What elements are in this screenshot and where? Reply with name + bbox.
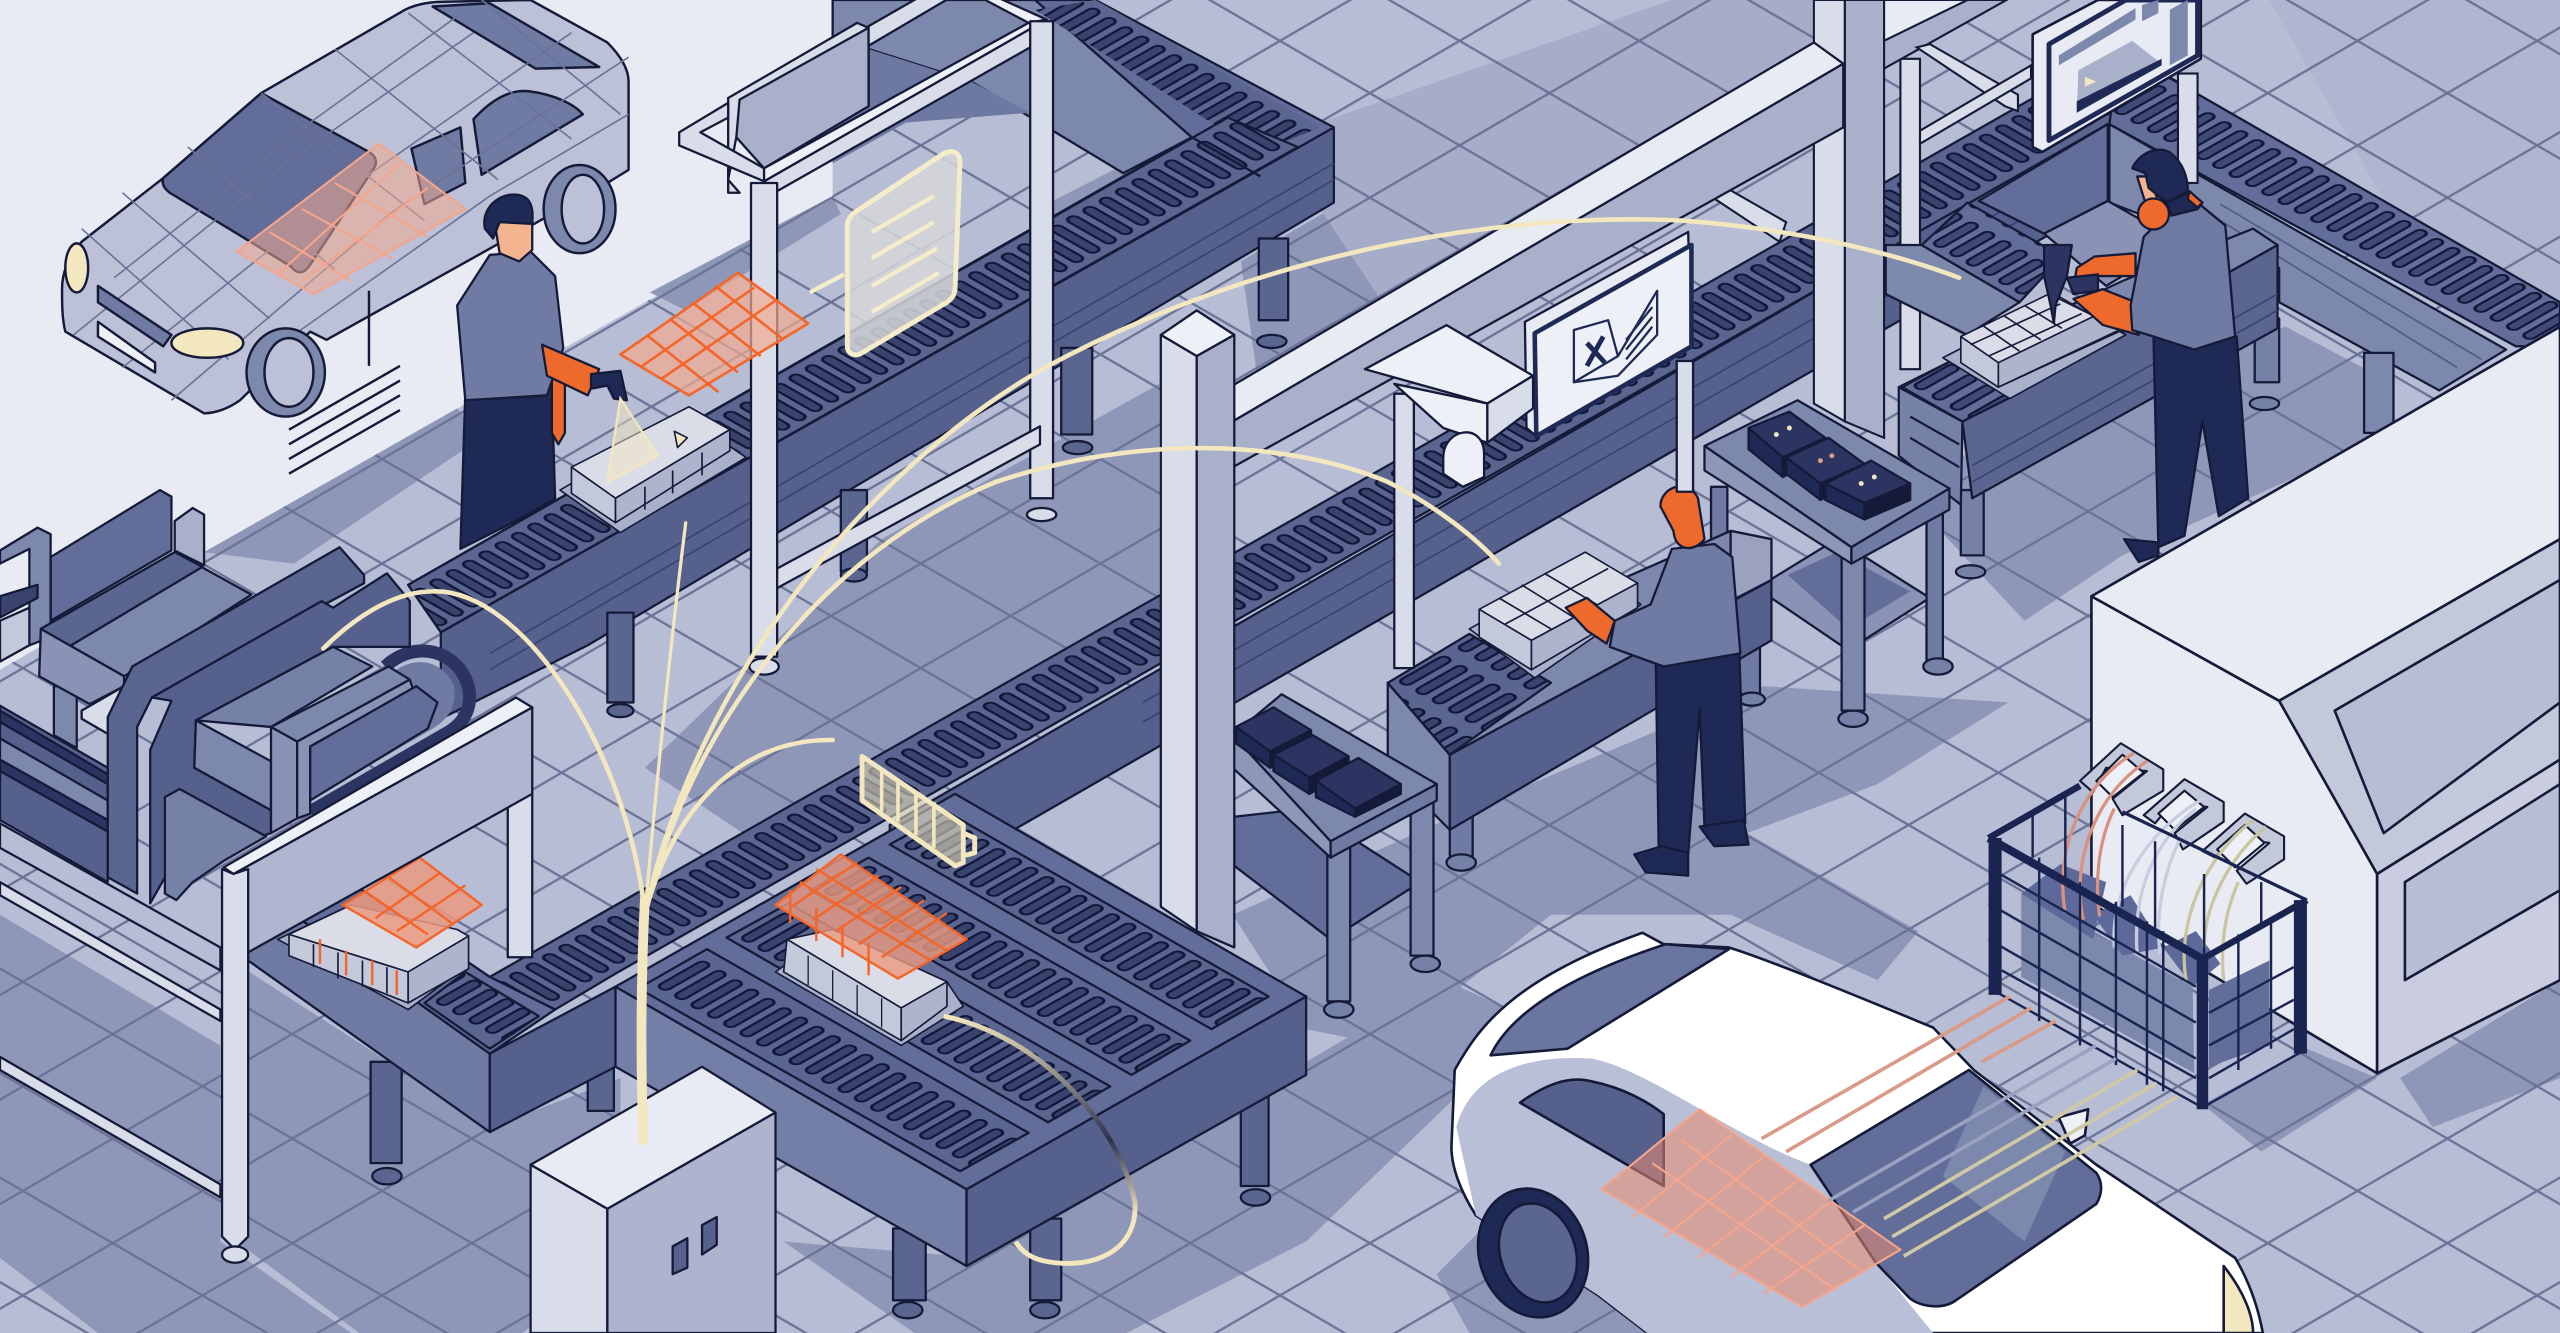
tray <box>1786 438 1864 500</box>
contents <box>2021 894 2194 1073</box>
dispenser <box>1443 432 1484 487</box>
strap <box>2167 193 2202 216</box>
strip <box>890 812 1269 1029</box>
headlight <box>2224 1266 2253 1333</box>
scanner <box>591 371 627 400</box>
icon: battery hologram <box>862 756 975 866</box>
window <box>2335 580 2560 833</box>
legs <box>460 389 555 549</box>
chain <box>310 651 470 812</box>
boot <box>2124 539 2158 562</box>
battery ghost <box>1602 1109 1900 1307</box>
hair <box>1660 486 1704 548</box>
lip and pane <box>728 23 869 193</box>
hair <box>484 194 533 239</box>
end slats <box>1902 361 2011 421</box>
torso <box>2131 203 2235 350</box>
corner slats <box>424 972 539 1049</box>
inner panel <box>1979 124 2108 234</box>
wheel <box>1462 1174 1604 1332</box>
rays into car <box>1762 996 2178 1256</box>
falling strands <box>2063 753 2266 980</box>
basket with hoppers <box>1989 743 2307 1109</box>
tall plate <box>51 490 171 621</box>
strip <box>638 949 1029 1171</box>
main slats <box>408 118 1298 632</box>
side window <box>1520 1080 1664 1186</box>
scanner beam <box>607 399 658 482</box>
post <box>222 869 248 1250</box>
tray <box>1236 707 1311 768</box>
upper beam <box>1884 0 2007 69</box>
legs <box>1656 637 1745 854</box>
top <box>1899 229 2278 421</box>
arch 2 <box>150 573 410 903</box>
shelf <box>1757 539 1930 650</box>
body shade <box>1456 1058 1933 1333</box>
speed lines <box>289 291 400 474</box>
inner back panel <box>833 0 1192 173</box>
conveyor table <box>616 794 1306 1318</box>
bracket <box>165 789 266 900</box>
orange hologram <box>320 858 482 995</box>
front bar <box>764 20 1047 181</box>
back leg slats <box>1035 0 1321 152</box>
torso <box>1610 544 1740 666</box>
small plate <box>175 508 204 565</box>
battery: grey under panel <box>278 905 469 1010</box>
tray <box>1825 461 1910 519</box>
glove lower <box>2073 289 2139 335</box>
side panel <box>890 123 2108 898</box>
wheels <box>247 328 325 417</box>
posts <box>751 183 777 657</box>
buttons <box>673 1238 687 1274</box>
post right <box>508 794 532 957</box>
battery ghost <box>237 144 465 294</box>
conveyor: top L-shaped belt <box>408 0 1334 719</box>
wireframe lines <box>73 0 629 400</box>
orange hologram: floor battery <box>620 273 808 395</box>
back bars <box>679 103 764 181</box>
dispenser and book monitor <box>1365 232 1693 668</box>
glove <box>542 345 599 395</box>
tray <box>1273 735 1349 794</box>
data arcs from cabinet <box>323 219 1959 1140</box>
windshield <box>163 93 376 272</box>
icon: book with tools <box>1574 291 1657 382</box>
glove upper <box>2073 253 2136 288</box>
legs <box>607 239 1288 717</box>
hair <box>2132 150 2188 203</box>
battery: table with orange hologram <box>776 854 967 1045</box>
overhead beam <box>1233 42 1843 467</box>
legs <box>371 1045 614 1184</box>
side panel <box>441 127 1334 719</box>
headlights <box>171 328 243 358</box>
rails <box>0 823 220 970</box>
door <box>2405 784 2560 980</box>
top bar <box>224 698 532 874</box>
box 2 <box>196 647 372 727</box>
roof window <box>433 3 599 69</box>
car: white foreground <box>1451 933 2263 1333</box>
darker upper floor <box>1273 0 1812 335</box>
tray <box>1316 758 1401 817</box>
frame top <box>248 849 555 1054</box>
conveyor: worker 2 table <box>1388 531 1771 871</box>
battery: being scanned <box>560 407 746 533</box>
arch 1 <box>108 547 364 894</box>
glove <box>1566 598 1615 644</box>
box 1 <box>41 552 251 676</box>
face <box>2137 176 2158 203</box>
big machine <box>2091 327 2560 1073</box>
side <box>248 882 490 1132</box>
column 2 <box>1814 0 1884 438</box>
legs <box>893 1096 1270 1318</box>
boots <box>1634 846 1688 876</box>
gate: white panel and frame <box>0 698 532 1263</box>
conveyor: left lower section <box>248 849 616 1184</box>
wire cage <box>1989 786 2307 1109</box>
legs <box>1711 487 1727 585</box>
windshield <box>1811 1070 2101 1306</box>
orange hologram <box>776 854 967 979</box>
lower bar <box>777 426 1040 588</box>
brace <box>1917 44 2018 111</box>
left frame <box>0 528 51 645</box>
grille <box>98 286 171 346</box>
conveyor: top right belt <box>2109 49 2560 433</box>
strip <box>810 858 1190 1075</box>
drill <box>2044 245 2072 323</box>
front side <box>1962 245 2278 498</box>
book monitor <box>1525 232 1691 436</box>
gate: scan frame <box>679 0 1056 675</box>
torso <box>457 252 563 400</box>
worker 2 <box>1566 486 1749 876</box>
lower belts <box>0 706 108 882</box>
hopper <box>2080 743 2163 815</box>
worker 3 <box>2044 150 2248 562</box>
hopper <box>2144 779 2224 849</box>
panel face <box>233 707 532 961</box>
rear glass <box>1491 944 1729 1055</box>
white box <box>1365 325 1533 403</box>
machine: left assembly <box>0 490 470 903</box>
battery: worker 2 <box>1469 552 1641 678</box>
mirror <box>2059 1109 2088 1144</box>
face <box>495 222 532 261</box>
battery: worker 3 <box>1943 294 2126 399</box>
sides <box>616 987 967 1266</box>
box 3 <box>271 666 410 742</box>
shelf <box>1234 809 1420 939</box>
left end with shelves <box>1899 387 1962 505</box>
strip <box>727 903 1110 1122</box>
tray <box>1749 412 1825 477</box>
table with trays: centre right <box>1704 400 1953 727</box>
top <box>616 794 1306 1189</box>
monitor: top right screen <box>2033 0 2201 152</box>
box 1 stand <box>54 686 77 748</box>
lower panel <box>1886 245 2020 335</box>
side windows <box>473 91 583 175</box>
cable: battery to cabinet <box>944 1016 1135 1263</box>
icon: document hologram <box>810 152 960 355</box>
legs <box>2153 337 2248 547</box>
column 1 <box>1161 310 1234 947</box>
cabinet <box>531 1067 776 1333</box>
support post <box>2364 353 2393 433</box>
hand <box>552 374 565 444</box>
conveyor: worker 3 table <box>1886 124 2279 578</box>
belt slats <box>490 49 2198 1010</box>
inner slats <box>1922 203 2062 302</box>
hopper <box>2202 814 2284 884</box>
worker 1 <box>457 194 627 549</box>
car: wireframe <box>62 0 629 417</box>
belt frame <box>408 0 1334 632</box>
poles and column 2 <box>1683 0 2198 438</box>
legs <box>1961 490 1984 555</box>
table with trays: centre <box>1233 694 1440 1018</box>
top <box>1704 400 1949 547</box>
conveyor: middle long belt <box>490 49 2198 1010</box>
headphones <box>2138 198 2169 230</box>
